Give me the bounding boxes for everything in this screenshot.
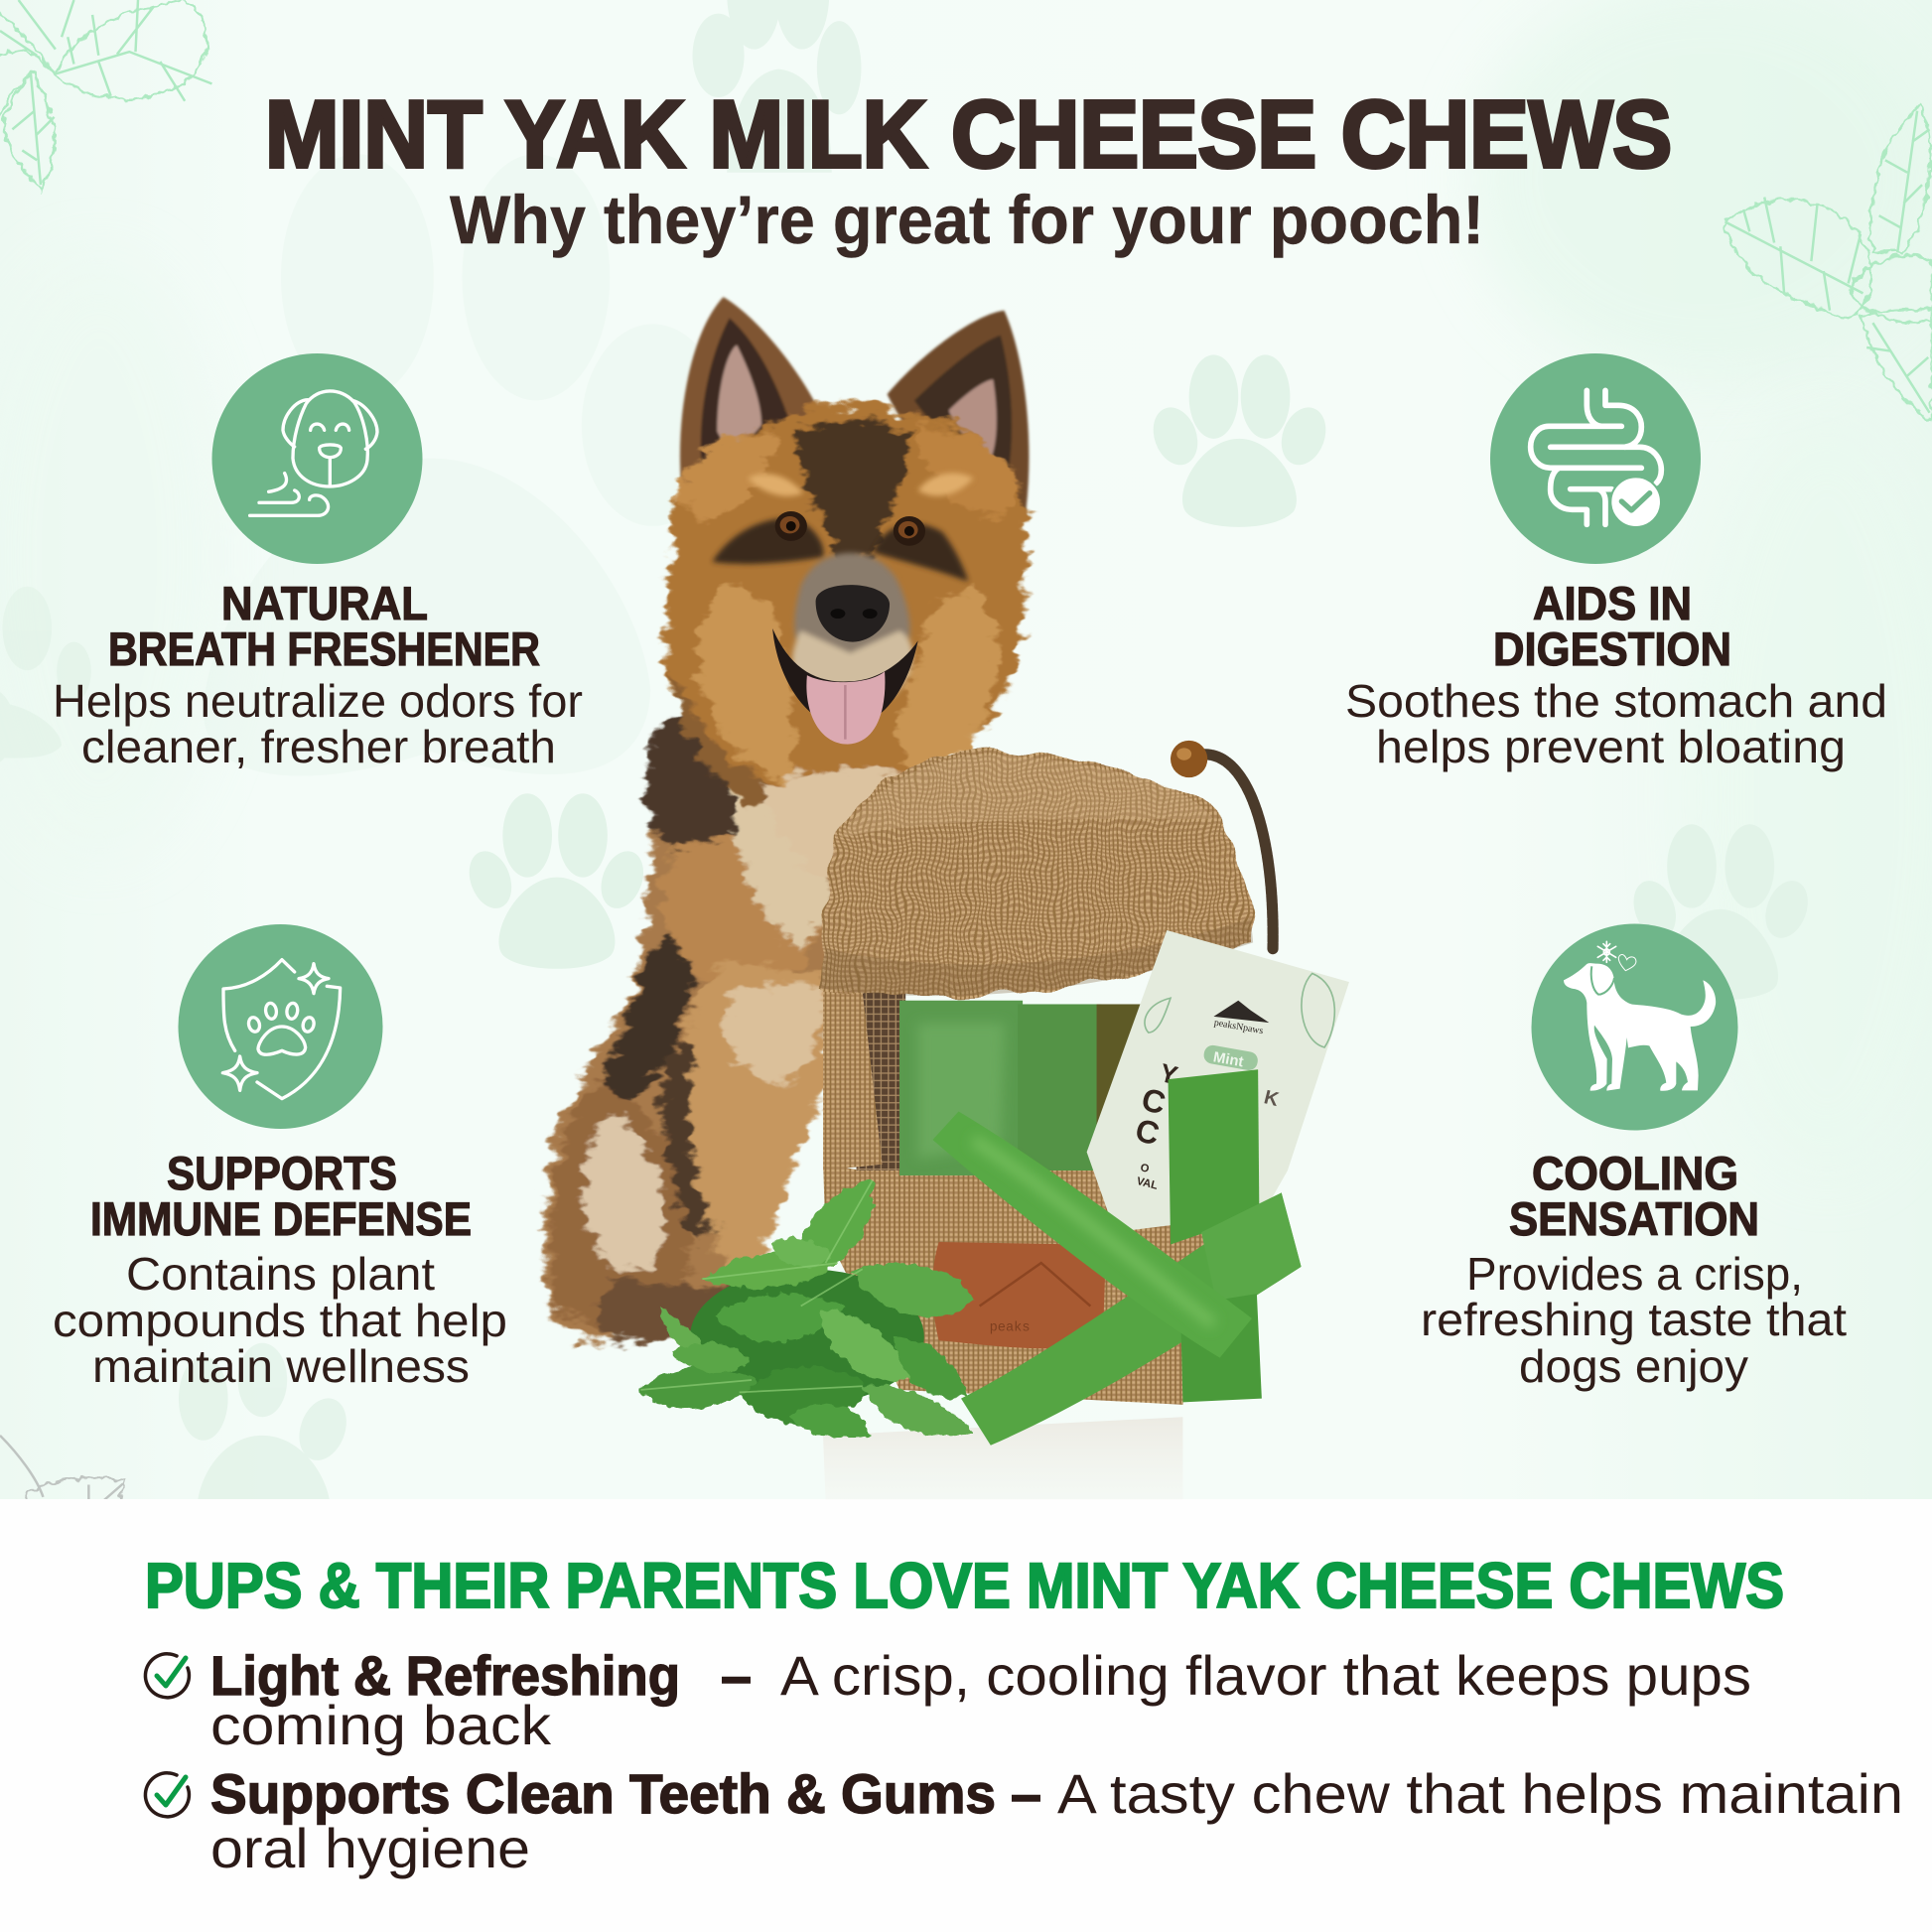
list item: light and refreshing [145,1644,1751,1756]
item text [210,1644,1751,1756]
item text: A tasty chew that helps maintain [1057,1762,1903,1825]
body text: cleaner, fresher breath [81,721,556,772]
heading [108,577,540,675]
icon: check [145,1654,189,1698]
product card: Mint [1212,1049,1245,1070]
item text: – [721,1644,752,1707]
mint sprig [640,1180,973,1438]
body text: compounds that help [53,1295,507,1346]
section heading: PUPS & THEIR PARENTS LOVE MINT YAK CHEESE CHEWS [145,1550,1784,1621]
product card: K [1262,1086,1282,1111]
item text: coming back [210,1694,552,1756]
dog mouth, tongue and nose [772,585,918,745]
icon: dog with snowflake and heart [1531,923,1737,1130]
body text: helps prevent bloating [1376,721,1846,772]
body text [1421,1248,1847,1392]
item text: Supports Clean Teeth & Gums [210,1762,996,1825]
product card: C [1138,1081,1170,1121]
product card: C [1132,1112,1163,1152]
heading: SUPPORTS [167,1147,397,1199]
heading: COOLING [1532,1147,1738,1199]
body text: maintain wellness [92,1340,470,1392]
panel: aids in digestion [1345,353,1887,772]
product card: VAL [1136,1175,1159,1192]
item text: oral hygiene [210,1817,530,1879]
body text: refreshing taste that [1421,1294,1847,1345]
body text: Helps neutralize odors for [53,675,583,727]
heading: BREATH FRESHENER [108,622,540,675]
heading [1493,577,1731,675]
leather patch: peaks [990,1320,1031,1335]
body text [1345,675,1887,772]
panel: cooling sensation [1421,923,1847,1392]
subtitle: Why they’re great for your pooch! [450,182,1484,258]
heading: NATURAL [221,577,428,629]
heading [1509,1147,1759,1245]
dog eyes [775,511,925,546]
product hero: dog, bag and chews [543,297,1349,1499]
heading: AIDS IN [1533,577,1692,629]
list item: supports clean teeth and gums [145,1762,1903,1879]
heading [90,1147,472,1245]
body text: Provides a crisp, [1466,1248,1803,1300]
yak cheese chews [932,1069,1302,1446]
icon: intestines [1490,353,1701,564]
dog [543,297,1029,1343]
item text [210,1762,1903,1879]
background paw prints [0,0,1815,1509]
panel: natural breath freshener [53,353,583,772]
item text: Light & Refreshing [210,1644,680,1707]
item text: – [1011,1762,1041,1825]
product card: O [1139,1162,1151,1175]
heading: SENSATION [1509,1192,1759,1245]
bottom white panel [0,1499,1932,1932]
body text: dogs enjoy [1519,1340,1748,1392]
product card: peaksNpaws [1213,1018,1264,1036]
bottom section [145,1550,1903,1879]
body text: Soothes the stomach and [1345,675,1887,727]
product card: Y [1157,1057,1180,1090]
icon: check [145,1773,189,1817]
panel: supports immune defense [53,924,507,1392]
icon: dog breath [212,353,423,564]
icon: shield with paw [179,924,383,1129]
body text [53,1248,507,1392]
burlap bag [819,741,1273,1405]
title: MINT YAK MILK CHEESE CHEWS [265,81,1672,188]
leather patch [932,1242,1105,1348]
reflection under product [823,1417,1182,1499]
product card [1087,930,1349,1232]
body text [53,675,583,772]
heading: DIGESTION [1493,622,1731,675]
item text: A crisp, cooling flavor that keeps pups [780,1644,1751,1707]
heading: IMMUNE DEFENSE [90,1192,472,1245]
body text: Contains plant [126,1248,435,1300]
